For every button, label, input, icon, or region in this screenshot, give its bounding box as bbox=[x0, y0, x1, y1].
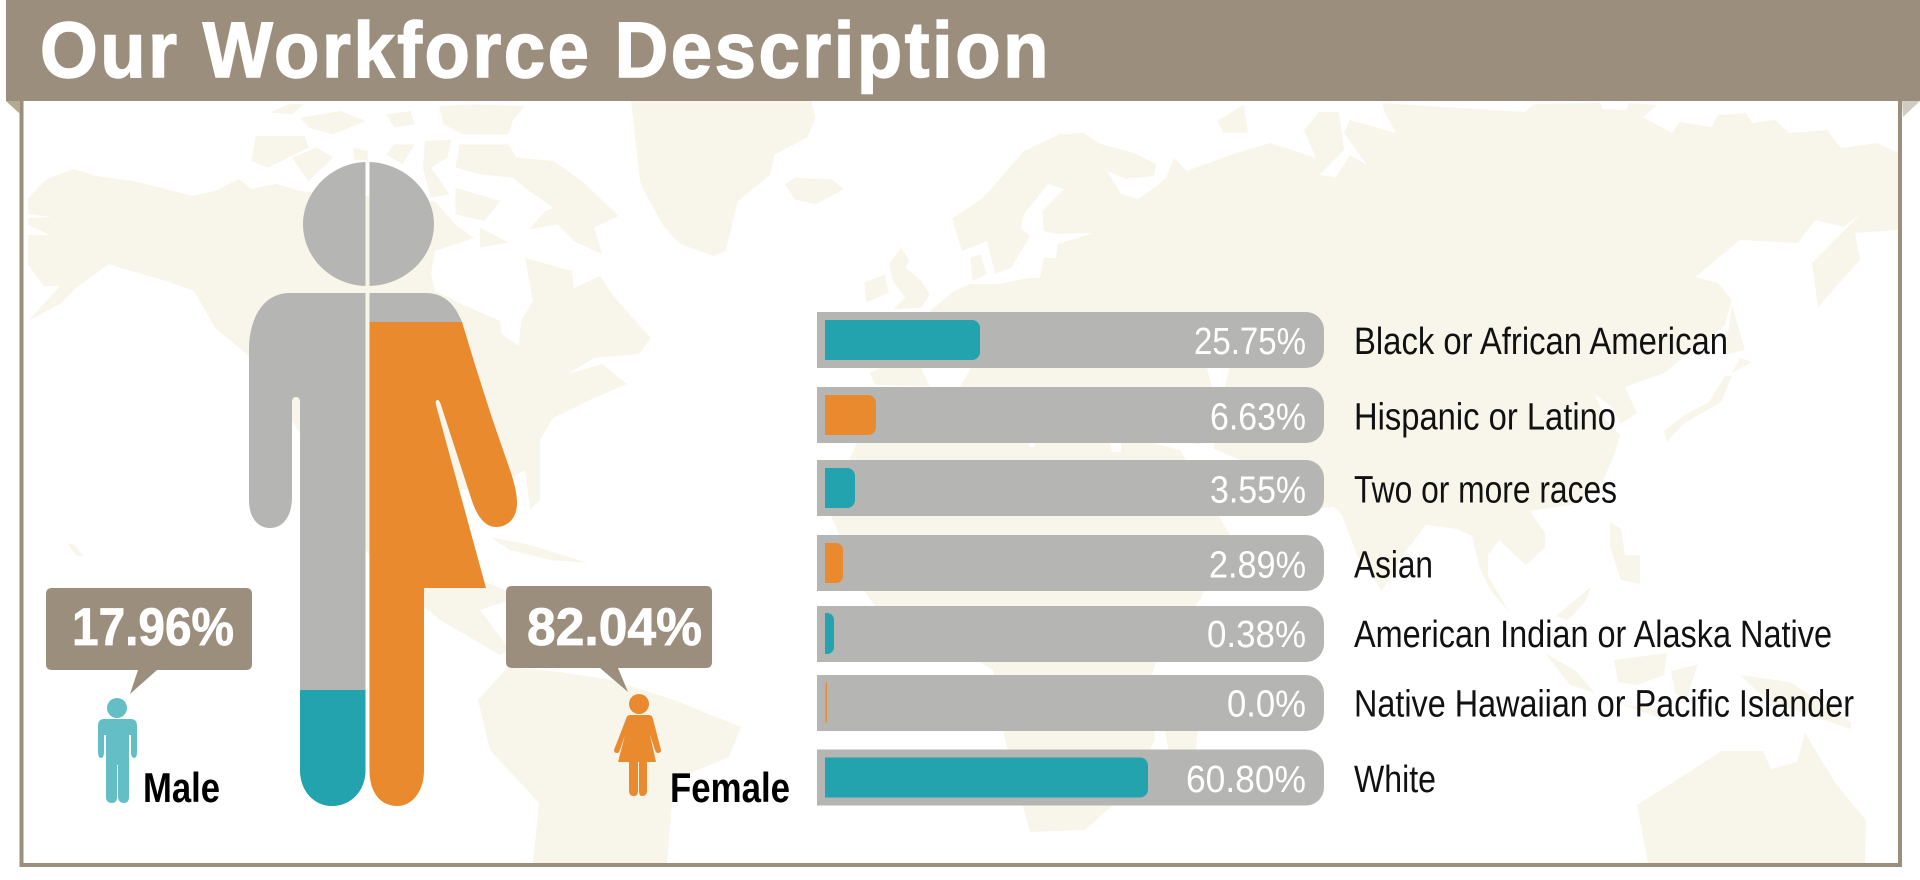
callout: female percentage: 82.04% bbox=[527, 598, 702, 657]
bar row: Hispanic or Latino: Hispanic or Latino bbox=[1354, 396, 1616, 438]
bar row: Black or African American: 25.75% bbox=[1194, 321, 1306, 363]
bar row: Native Hawaiian or Pacific Islander bbox=[817, 675, 1854, 731]
title banner bbox=[6, 0, 1920, 101]
right banner fold bbox=[1902, 101, 1920, 117]
icon: female bbox=[614, 694, 661, 796]
bar row: Black or African American: Black or African American bbox=[1354, 321, 1728, 363]
bar row: Asian: Asian bbox=[1354, 544, 1433, 586]
bar row: Asian: 2.89% bbox=[1209, 544, 1306, 586]
female body orange bbox=[370, 322, 517, 806]
callout: female percentage bbox=[506, 586, 712, 692]
bar row: American Indian or Alaska Native: 0.38% bbox=[1207, 614, 1306, 656]
head right half bbox=[370, 162, 434, 286]
female shoulder gray segment bbox=[370, 293, 462, 322]
callout: male percentage: 17.96% bbox=[72, 598, 234, 657]
bar row: Hispanic or Latino: 6.63% bbox=[1210, 396, 1306, 438]
bar row: American Indian or Alaska Native bbox=[817, 606, 1832, 662]
left banner fold bbox=[6, 101, 20, 114]
icon: male bbox=[98, 698, 137, 803]
bar row: Two or more races: Two or more races bbox=[1354, 470, 1617, 512]
label: female: Female bbox=[670, 764, 790, 811]
title: Our Workforce Description bbox=[40, 7, 1051, 95]
bar row: Two or more races bbox=[817, 460, 1617, 516]
bar row: Native Hawaiian or Pacific Islander: 0.0% bbox=[1227, 684, 1306, 726]
bar row: American Indian or Alaska Native: American Indian or Alaska Native bbox=[1354, 614, 1832, 656]
bar row: Two or more races: 3.55% bbox=[1210, 470, 1306, 512]
main figure: half male, half female bbox=[249, 162, 517, 806]
callout: male percentage bbox=[46, 588, 252, 694]
male body bbox=[249, 293, 366, 806]
bar row: White: 60.80% bbox=[1186, 759, 1306, 801]
bar row: White bbox=[817, 750, 1436, 806]
male leg teal segment bbox=[300, 690, 366, 806]
bar row: White: White bbox=[1354, 759, 1436, 801]
head left half bbox=[303, 162, 366, 286]
bar row: Black or African American bbox=[817, 312, 1728, 368]
label: male: Male bbox=[143, 764, 220, 811]
bar row: Hispanic or Latino bbox=[817, 387, 1616, 443]
bar row: Asian bbox=[817, 535, 1433, 591]
